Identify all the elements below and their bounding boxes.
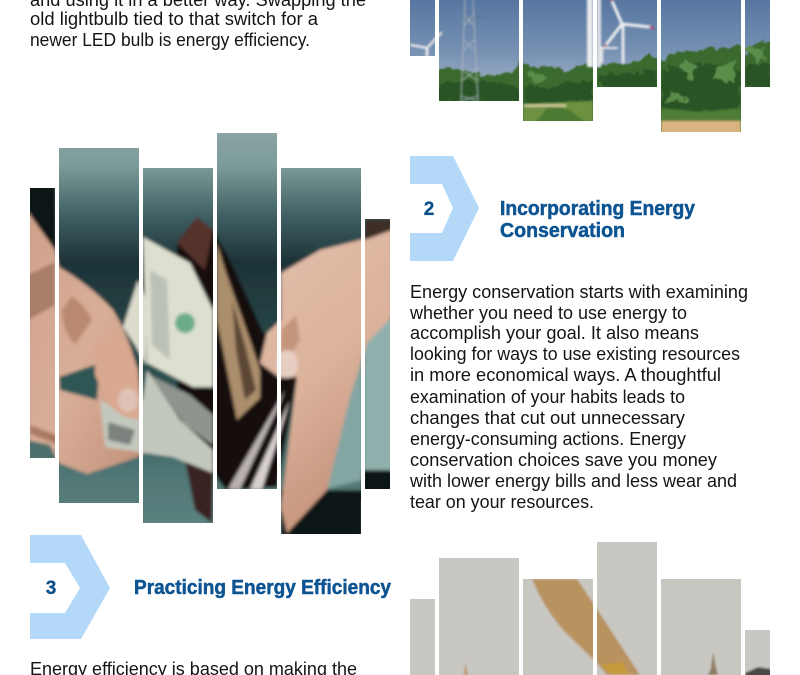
small boat bbox=[708, 652, 718, 675]
heading: Incorporating Energy Conservation bbox=[500, 198, 696, 242]
left thumb bbox=[92, 352, 139, 420]
tree line bbox=[439, 38, 770, 132]
photo: hands holding wallet with dollars in strips bbox=[20, 125, 400, 540]
body text: energy conservation: changes that cut out unnecessary bbox=[410, 408, 685, 428]
heading: Practicing Energy Efficiency: Practicing Energy Efficiency bbox=[134, 577, 392, 599]
intro text continuation bbox=[30, 0, 366, 50]
body text: energy conservation: whether you need to use energy to bbox=[409, 303, 687, 323]
body text: energy conservation: in more economical ways. A thoughtful bbox=[410, 365, 721, 385]
heading: Incorporating Energy Conservation: Conservation bbox=[500, 220, 625, 242]
sand strip bbox=[661, 121, 741, 134]
wallet cards bbox=[228, 390, 285, 489]
body text: energy conservation bbox=[409, 282, 748, 512]
intro text continuation: old lightbulb tied to that switch for a bbox=[30, 9, 319, 29]
icon: chevron badge 3: 3 bbox=[46, 578, 56, 599]
dollar bill upper bbox=[143, 237, 213, 387]
photo: sailboats on calm water in strips bbox=[400, 535, 780, 675]
body text: energy conservation: looking for ways to use existing resources bbox=[410, 344, 740, 364]
icon: large wind turbine bbox=[602, 0, 653, 62]
dark mound bbox=[745, 667, 772, 675]
tan sail bbox=[532, 579, 640, 675]
pylon bbox=[461, 0, 485, 101]
photo: wind turbines and pylon in strips bbox=[410, 0, 770, 132]
icon: chevron badge 2: 2 bbox=[424, 199, 434, 220]
icon: small wind turbine bbox=[411, 33, 441, 56]
left hand bbox=[28, 212, 150, 474]
body text: energy conservation: accomplish your goal. It also means bbox=[410, 323, 699, 343]
body text: energy conservation: energy-consuming actions. Energy bbox=[410, 429, 686, 449]
tall turbine towers bbox=[587, 0, 593, 67]
body text: energy conservation: tear on your resources. bbox=[410, 492, 594, 512]
teal background bbox=[53, 133, 390, 534]
body text: energy conservation: Energy conservation starts with examining bbox=[410, 282, 748, 302]
dollar bill lower bbox=[100, 370, 213, 473]
body text: energy conservation: conservation choices save you money bbox=[410, 450, 717, 470]
body text: energy conservation: examination of your habits leads to bbox=[410, 387, 685, 407]
icon: chevron badge 3 bbox=[30, 535, 110, 639]
intro text continuation: newer LED bulb is energy efficiency. bbox=[30, 30, 310, 50]
heading: Incorporating Energy Conservation: Incorporating Energy bbox=[500, 198, 696, 220]
grass field bbox=[523, 101, 593, 122]
wallet body bbox=[177, 217, 297, 490]
icon: chevron badge 2 bbox=[410, 156, 479, 261]
body text: energy conservation: with lower energy bills and less wear and bbox=[409, 471, 737, 491]
green seal bbox=[175, 313, 195, 333]
wallet pages bbox=[217, 243, 260, 420]
right hand bbox=[260, 230, 392, 533]
distant sail bbox=[464, 663, 468, 675]
